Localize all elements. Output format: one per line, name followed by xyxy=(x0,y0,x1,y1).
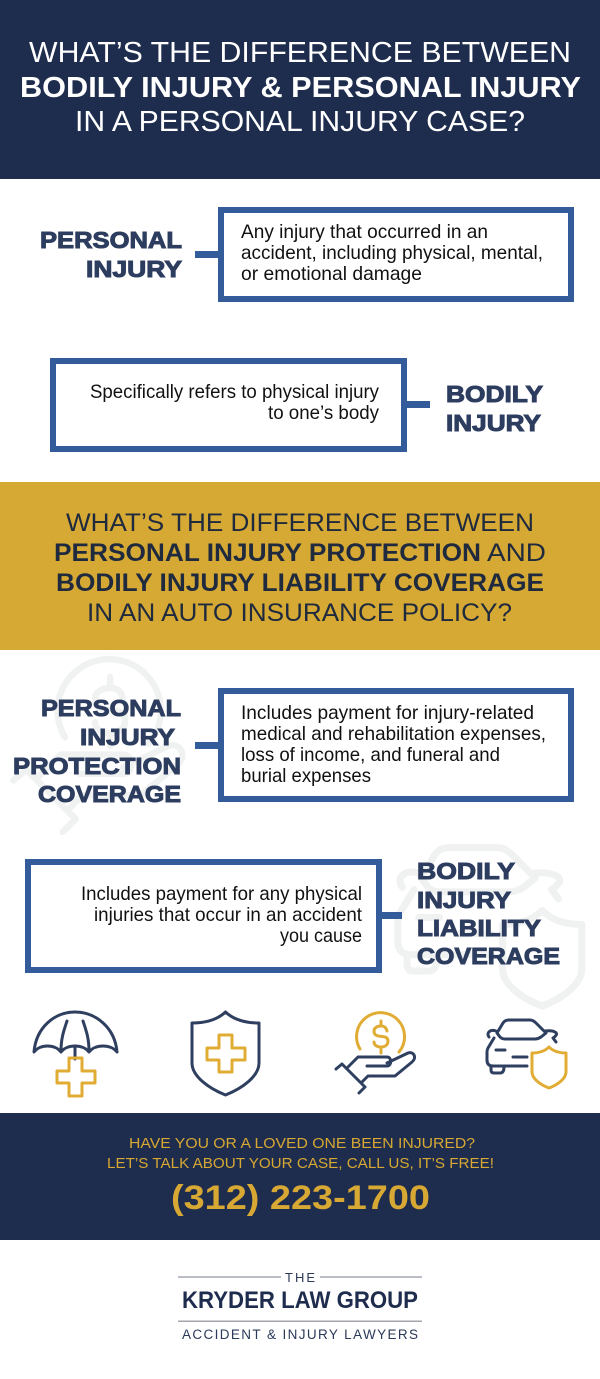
logo: KRYDER LAW GROUP xyxy=(182,1287,418,1314)
gold question band: WHAT’S THE DIFFERENCE BETWEEN xyxy=(66,509,534,537)
personal injury protection coverage: loss of income, and funeral and xyxy=(241,744,500,766)
bodily injury liability coverage: INJURY xyxy=(417,887,511,913)
footer call to action xyxy=(0,1113,600,1240)
logo xyxy=(178,1270,422,1342)
bodily injury definition: INJURY xyxy=(446,410,541,436)
personal injury definition: or emotional damage xyxy=(241,263,422,285)
icon: umbrella with cross xyxy=(34,1012,117,1096)
personal injury definition: PERSONAL xyxy=(40,227,182,253)
bodily injury definition xyxy=(53,361,543,449)
watermark icon: hand and coin xyxy=(13,659,182,832)
personal injury definition: INJURY xyxy=(86,256,182,282)
bodily injury liability coverage: you cause xyxy=(280,925,362,947)
gold question band: AND xyxy=(487,539,546,567)
personal injury protection coverage xyxy=(13,691,571,807)
gold question band: PERSONAL INJURY PROTECTION xyxy=(54,539,481,567)
bodily injury definition: Specifically refers to physical injury xyxy=(90,381,379,403)
bodily injury liability coverage: LIABILITY xyxy=(417,915,541,941)
header band xyxy=(0,0,600,179)
personal injury protection coverage: medical and rehabilitation expenses, xyxy=(241,723,546,745)
personal injury protection coverage: burial expenses xyxy=(241,765,371,787)
footer call to action: LET’S TALK ABOUT YOUR CASE, CALL US, IT’S FREE! xyxy=(107,1155,494,1172)
personal injury definition: accident, including physical, mental, xyxy=(241,242,543,264)
icon: car with shield xyxy=(487,1020,566,1088)
icon: hand holding coin xyxy=(336,1013,415,1093)
header band: BODILY INJURY & PERSONAL INJURY xyxy=(20,72,581,104)
logo: ACCIDENT & INJURY LAWYERS xyxy=(182,1327,418,1342)
personal injury protection coverage: COVERAGE xyxy=(38,781,181,807)
icon: shield with cross xyxy=(192,1012,259,1095)
footer call to action: HAVE YOU OR A LOVED ONE BEEN INJURED? xyxy=(129,1135,475,1152)
bodily injury liability coverage: COVERAGE xyxy=(417,943,560,969)
footer call to action: (312) 223-1700 xyxy=(171,1179,430,1217)
header band: WHAT’S THE DIFFERENCE BETWEEN xyxy=(29,37,571,69)
bodily injury liability coverage: Includes payment for any physical xyxy=(81,883,362,905)
watermark icon: car and shield xyxy=(398,848,582,1006)
personal injury protection coverage: Includes payment for injury-related xyxy=(241,702,534,724)
bodily injury liability coverage xyxy=(28,858,560,970)
personal injury definition: Any injury that occurred in an xyxy=(241,221,488,243)
personal injury protection coverage: PERSONAL xyxy=(41,695,181,721)
bodily injury definition: to one’s body xyxy=(268,402,379,424)
logo: THE xyxy=(285,1270,315,1285)
bodily injury definition: BODILY xyxy=(446,381,543,407)
gold question band xyxy=(0,482,600,650)
gold question band: BODILY INJURY LIABILITY COVERAGE xyxy=(56,569,544,597)
personal injury protection coverage: INJURY xyxy=(80,724,175,750)
personal injury protection coverage: PROTECTION xyxy=(13,753,181,779)
bodily injury liability coverage: injuries that occur in an accident xyxy=(94,904,363,926)
gold question band: IN AN AUTO INSURANCE POLICY? xyxy=(87,599,512,627)
personal injury definition xyxy=(40,210,571,299)
header band: IN A PERSONAL INJURY CASE? xyxy=(75,106,525,138)
bodily injury liability coverage: BODILY xyxy=(417,858,515,884)
